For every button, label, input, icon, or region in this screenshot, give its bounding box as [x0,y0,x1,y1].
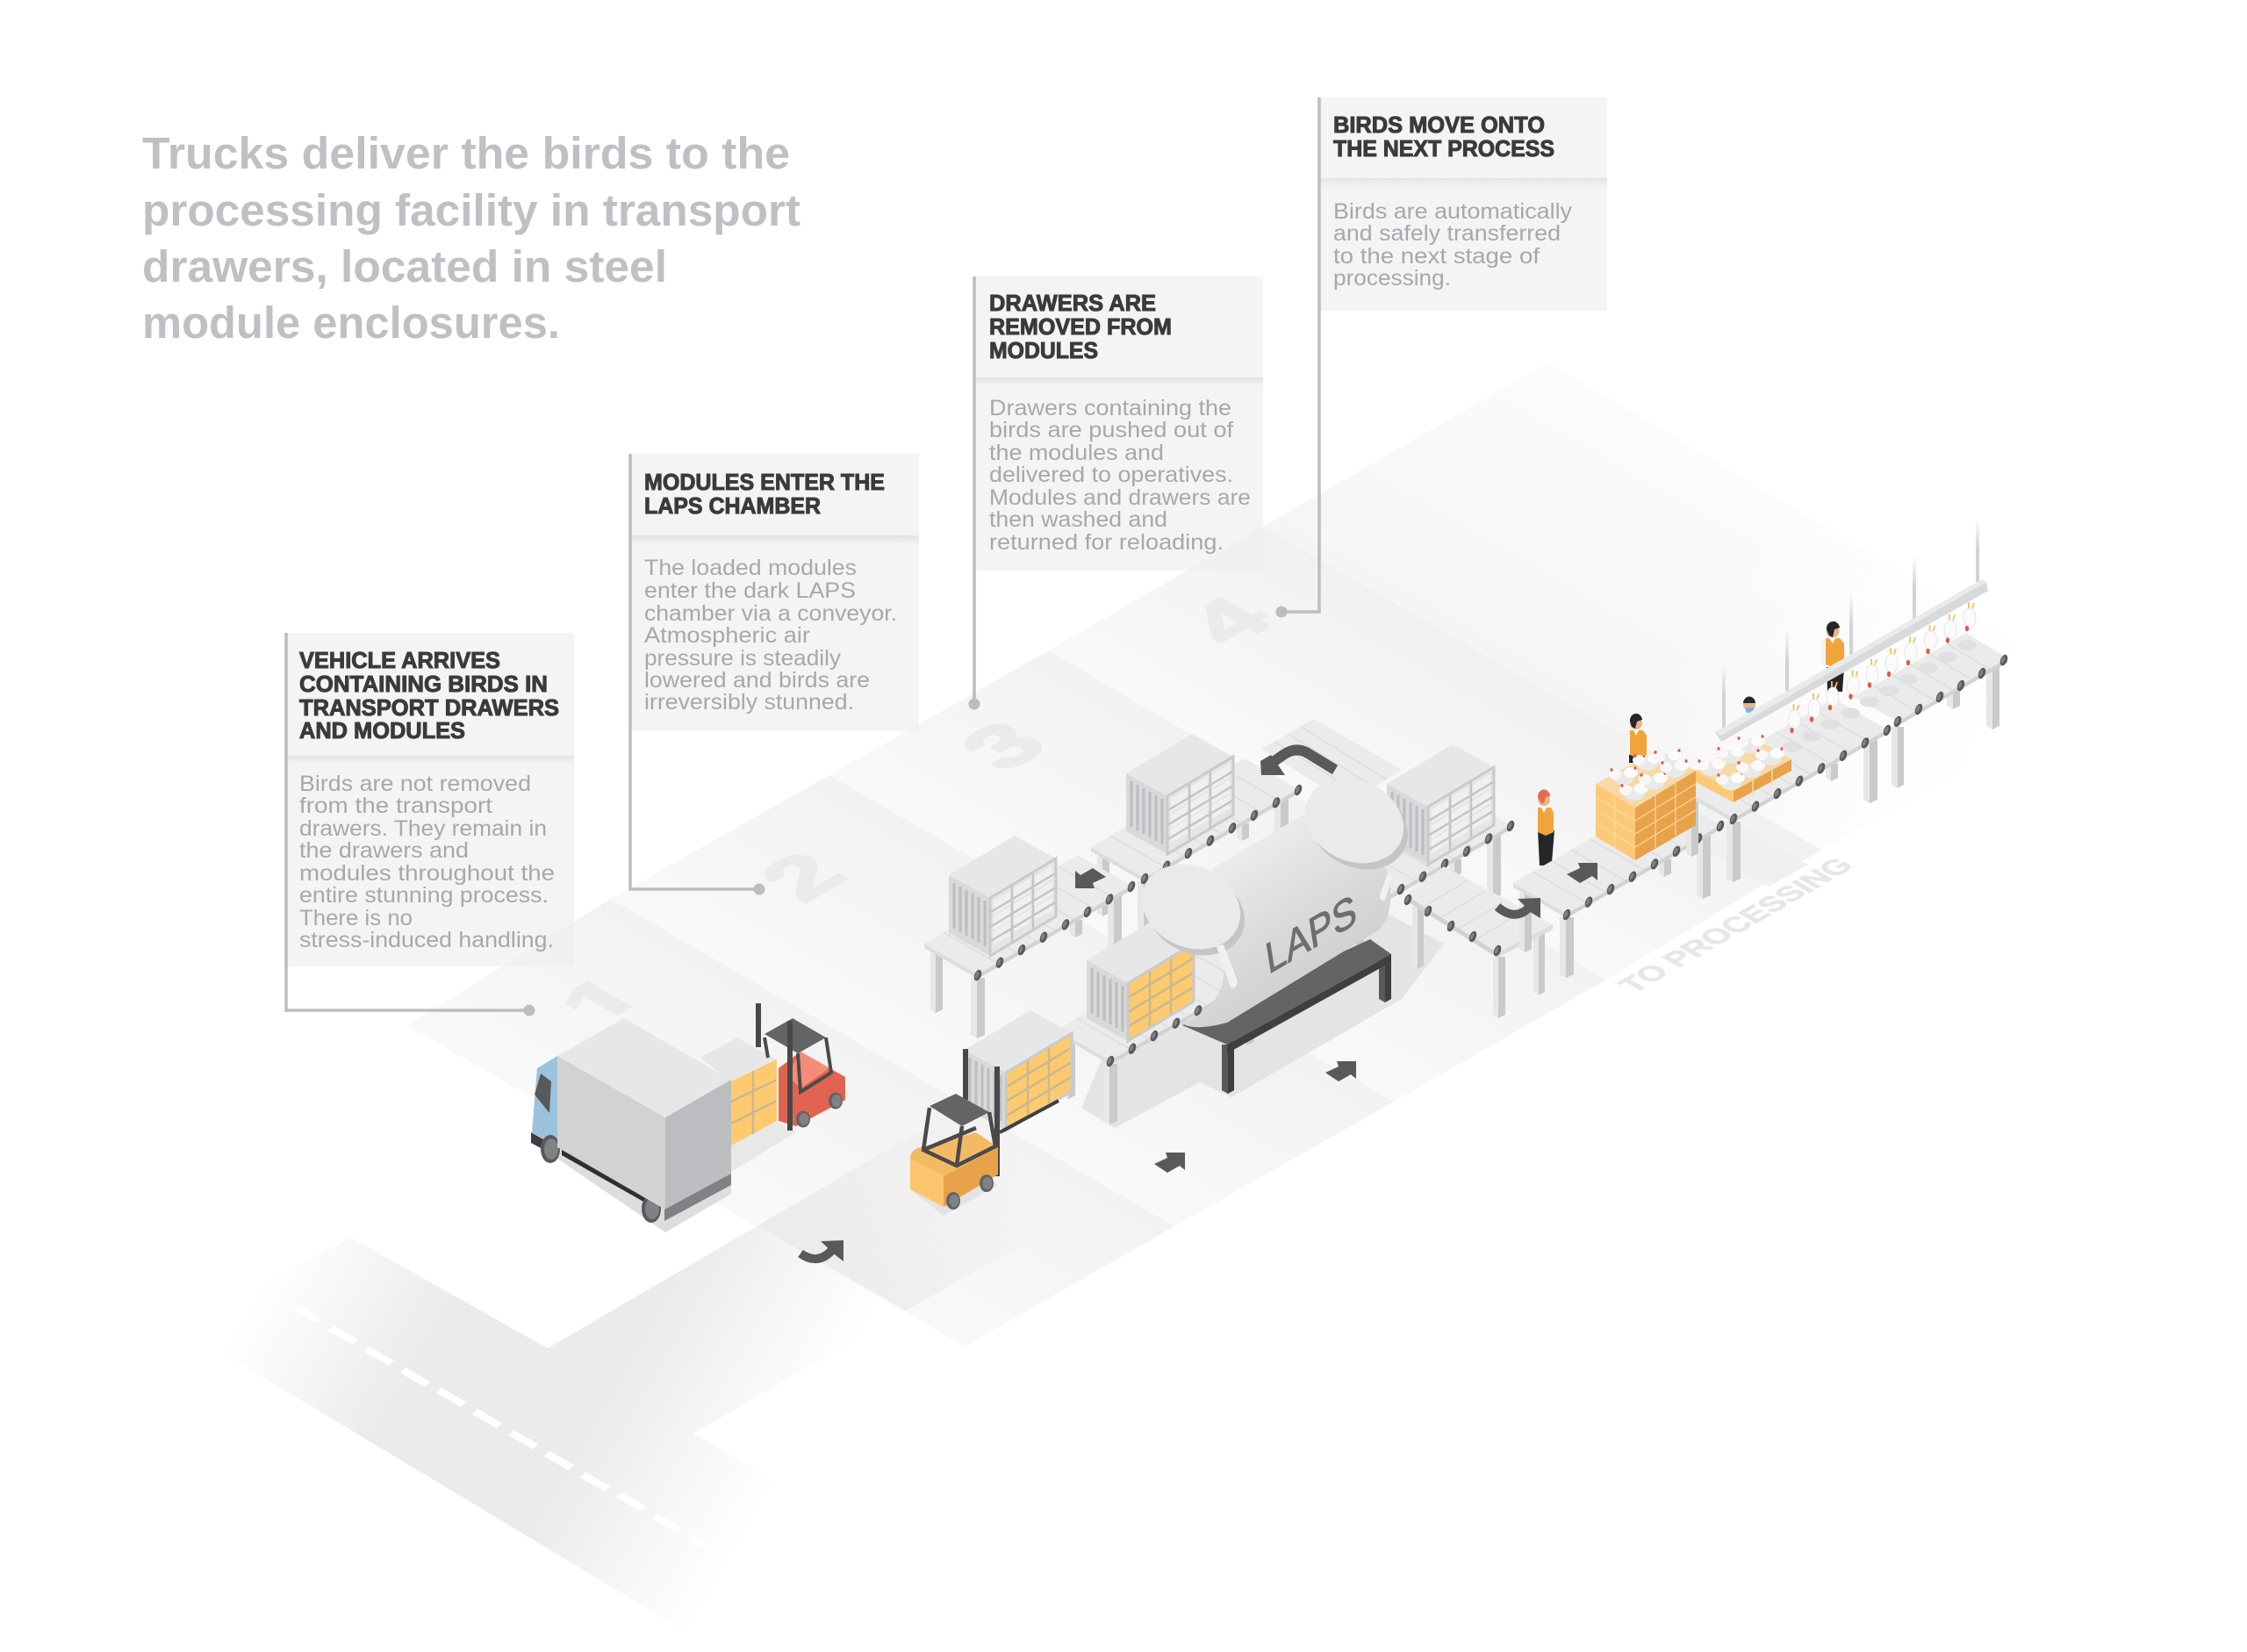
crates: stack [1596,749,1696,860]
floor label: to processing: TO PROCESSING [1612,853,1861,997]
body text: the modules and [989,441,1164,465]
arrow: straight on floor [1154,1153,1185,1173]
body text: Drawers containing the [989,396,1231,420]
overhead rail hanger rods [1722,519,1979,729]
chamber label: LAPS [1262,886,1360,984]
body text: stress-induced handling. [299,928,554,952]
heading [644,469,885,519]
body text: Birds are automatically [1333,199,1573,224]
body text [644,556,897,715]
module on red forklift [700,1038,777,1146]
heading: DRAWERS ARE [989,290,1156,316]
body text: entire stunning process. [299,883,549,908]
body text [1333,199,1573,291]
body text: delivered to operatives. [989,463,1233,487]
forklift: red, carrying module [700,1003,845,1146]
arrow: curved on conveyor [1497,898,1540,918]
body text: processing. [1333,266,1451,291]
body text: returned for reloading. [989,530,1224,555]
leader line and dot [1276,97,1319,618]
heading [1333,111,1554,162]
title: module enclosures. [142,298,560,348]
truck chassis and wheels [541,1135,661,1223]
conveyor: upper left [1091,758,1303,942]
module: right grey [1387,744,1494,865]
heading: MODULES ENTER THE [644,469,885,495]
heading: VEHICLE ARRIVES [299,647,500,673]
floor number 2: 2 [739,840,865,913]
floor: road and junction [180,1226,905,1641]
conveyor: crates [1513,794,1726,978]
chamber end door: left [1128,849,1259,988]
floor: process plate with four numbered sections [407,363,2103,1347]
leader line and dot [969,277,980,709]
truck cargo box [557,1018,731,1210]
heading: BIRDS MOVE ONTO [1333,111,1545,138]
conveyor: front [1057,941,1269,1124]
leader line and dot [286,633,535,1016]
body text: and safely transferred [1333,221,1561,246]
floor shadows [532,821,1808,1232]
body text: drawers. They remain in [299,816,547,841]
title: drawers, located in steel [142,241,667,291]
body text: to the next stage of [1333,244,1540,269]
panel: step 4 birds move on [1276,97,1607,618]
conveyor: far end [1853,633,2009,788]
hanging birds [1782,602,1977,752]
title [142,128,800,348]
chamber end door: right [1291,763,1422,901]
worker: behind rail [1821,621,1844,692]
heading: THE NEXT PROCESS [1333,135,1554,162]
floor number 1: 1 [535,961,677,1044]
body text: Birds are not removed [299,772,531,796]
body text [299,772,555,952]
body text: irreversibly stunned. [644,690,854,715]
crates: flat layer [1696,735,1791,802]
worker: at crates [1626,714,1647,763]
heading [989,290,1172,363]
truck tail bumper [664,1174,731,1221]
module: upper grey [1126,734,1233,854]
module: yellow drawers entering chamber [1087,921,1194,1041]
panel: step 2 modules enter chamber [630,454,919,895]
worker: red hard hat [1534,789,1554,866]
arrow: on left conveyor [1075,868,1106,888]
body text: enter the dark LAPS [644,578,856,603]
body text: The loaded modules [644,556,857,580]
body text: then washed and [989,507,1167,532]
body text: There is no [299,906,413,930]
body text: pressure is steadily [644,646,842,671]
body text: chamber via a conveyor. [644,601,897,626]
LAPS chamber [1128,763,1422,1027]
arrow: curved on floor [800,1240,844,1261]
arrow: on crate conveyor [1567,863,1597,883]
worker: masked [1743,696,1755,714]
arrow: straight on floor by bench [1325,1061,1356,1081]
panel: step 1 vehicle arrives [286,633,574,1016]
body text [989,396,1251,555]
heading: REMOVED FROM [989,313,1172,340]
module: left grey [949,836,1056,956]
overhead rail [1715,579,1988,742]
leader line and dot [630,454,765,895]
conveyor: left [924,855,1137,1038]
heading: TRANSPORT DRAWERS [299,694,559,721]
conveyor: u-turn at rear [1261,719,1402,803]
forklift: orange [910,1049,1059,1210]
conveyor: upper right [1303,794,1516,978]
body text: Modules and drawers are [989,485,1251,510]
panel: step 3 drawers removed [969,277,1263,709]
conveyor: bird crates [1680,699,1892,882]
heading: MODULES [989,337,1098,363]
conveyor: after chamber [1403,866,1553,1018]
body text: birds are pushed out of [989,418,1233,442]
body text: the drawers and [299,838,469,863]
body text: modules throughout the [299,861,555,886]
delivery truck [531,1018,731,1223]
heading: AND MODULES [299,717,465,743]
body text: Atmospheric air [644,623,810,648]
body text: lowered and birds are [644,668,870,693]
module on orange forklift [965,1010,1072,1131]
body text: from the transport [299,794,492,818]
heading [299,647,559,743]
arrow: u-turn [1260,750,1335,775]
truck cab [531,1056,557,1157]
heading: CONTAINING BIRDS IN [299,671,548,697]
floor number 3: 3 [940,709,1066,782]
floor number 4: 4 [1166,585,1292,657]
heading: LAPS CHAMBER [644,492,821,519]
title: processing facility in transport [142,185,800,235]
title: Trucks deliver the birds to the [142,128,790,178]
bench under chamber [1182,939,1391,1094]
